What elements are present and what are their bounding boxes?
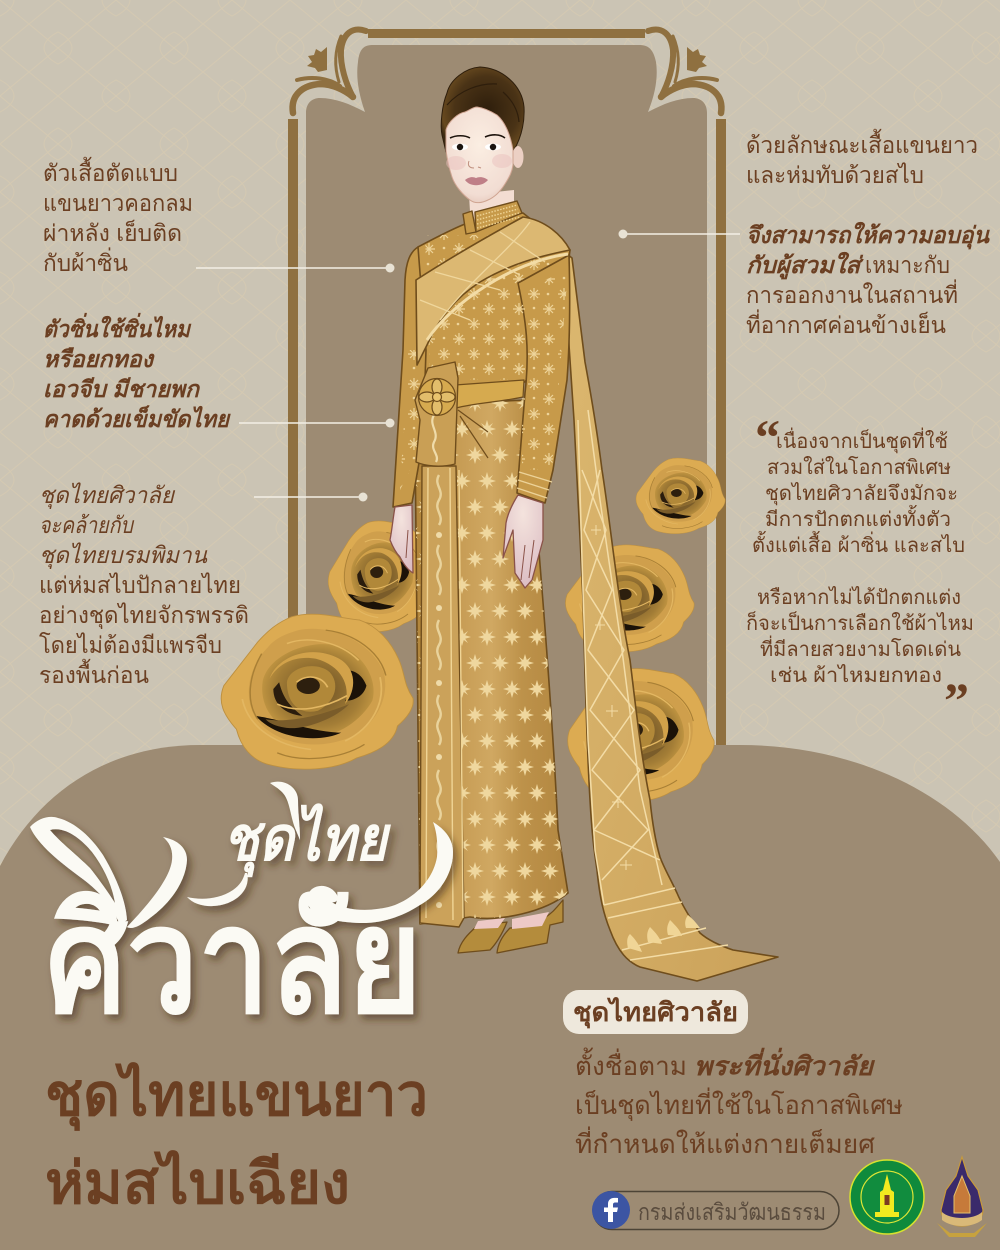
left text block: comparison [39,482,249,688]
closing quote mark: ” [944,672,969,728]
left text block: comparison: ชุดไทยศิวาลัย [39,482,175,509]
description text: พระที่นั่งศิวาลัย [694,1047,876,1081]
facebook pill: กรมส่งเสริมวัฒนธรรม [638,1199,826,1225]
left text block: skirt: ตัวซิ่นใช้ซิ่นไหม [43,312,192,342]
description text: เป็นชุดไทยที่ใช้ในโอกาสพิเศษ [575,1087,903,1121]
front panel of skirt [420,466,464,927]
bodice [413,213,570,390]
title swashes [30,782,453,928]
opening quote mark: “ [755,409,780,465]
quote block: เช่น ผ้าไหมยกทอง [770,664,942,687]
left text block: skirt: เอวจีบ มีชายพก [43,376,201,402]
subtitle: ชุดไทยแขนยาว [45,1062,428,1132]
shoes [458,900,563,953]
quote block: ชุดไทยศิวาลัยจึงมักจะ [765,482,958,506]
subtitle: ห่มสไบเฉียง [45,1150,350,1216]
left sleeve [393,247,426,507]
right text block: warmth: และห่มทับด้วยสไบ [746,162,924,188]
main title [30,782,453,1044]
pleat and belt [415,362,524,466]
logo: department of cultural promotion [850,1160,924,1234]
name pill: ชุดไทยศิวาลัย [573,996,738,1029]
description text: ที่กำหนดให้แต่งกายเต็มยศ [575,1126,875,1159]
right text block: warmth [746,129,990,338]
right text block: warmth: ที่อากาศค่อนข้างเย็น [746,309,946,338]
left text block: comparison: ชุดไทยบรมพิมาน [39,542,208,569]
right text block: warmth: จึงสามารถให้ความอบอุ่น [746,221,990,250]
description text [575,1047,903,1159]
description text: ตั้งชื่อตาม [575,1047,687,1081]
bottom hill [0,745,1000,1250]
left text block: comparison: จะคล้ายกับ [39,512,135,538]
left text block: comparison: อย่างชุดไทยจักรพรรดิ [39,602,249,629]
icon: facebook [592,1191,630,1229]
right text block: warmth: ด้วยลักษณะเสื้อแขนยาว [746,129,978,158]
figure in Thai dress [390,67,778,981]
hands [390,495,543,588]
quote block: ก็จะเป็นการเลือกใช้ผ้าไหม [746,610,974,635]
hanging sash [562,250,778,981]
big rose in front [221,614,413,769]
logo: ministry of culture [937,1157,987,1237]
left text block: blouse [43,157,193,276]
right text block: warmth: กับผู้สวมใส่ [746,251,864,280]
left text block: skirt: หรือยกทอง [43,346,155,372]
left text block: comparison: โดยไม่ต้องมีแพรจีบ [39,632,222,658]
right sleeve [517,255,570,503]
head [441,67,524,203]
quote block: ที่มีลายสวยงามโดดเด่น [760,635,961,661]
left text block: comparison: แต่ห่มสไบปักลายไทย [39,572,241,598]
quote block: หรือหากไม่ได้ปักตกแต่ง [757,586,961,609]
left text block: skirt [43,312,231,432]
right text block: warmth: เหมาะกับ [865,252,950,278]
quote block: เนื่องจากเป็นชุดที่ใช้ [776,427,948,454]
neck and collar [463,190,522,234]
title line: chut thai: ชุดไทย [223,803,391,878]
left text block: comparison: รองพื้นก่อน [39,659,149,688]
right text block: warmth: การออกงานในสถานที่ [746,279,958,308]
left text block: blouse: ผ่าหลัง เย็บติด [43,218,182,246]
left text block: skirt: คาดด้วยเข็มขัดไทย [43,405,231,432]
subtitle [45,1062,428,1216]
skirt [415,400,568,924]
left text block: blouse: แขนยาวคอกลม [43,190,193,216]
rose decorations [328,458,725,801]
sash across chest [416,217,570,365]
ornate frame [288,29,726,759]
left text block: blouse: กับผ้าซิ่น [43,247,128,276]
title line: siwalai: ศิวาลัย [46,879,422,1044]
left text block: blouse: ตัวเสื้อตัดแบบ [43,157,178,186]
quote block [746,409,974,728]
arch panel [306,45,707,750]
facebook pill [592,1191,839,1230]
quote block: มีการปักตกแต่งทั้งตัว [765,505,951,531]
quote block: ตั้งแต่เสื้อ ผ้าซิ่น และสไบ [752,531,965,557]
callout lines [196,230,740,502]
quote block: สวมใส่ในโอกาสพิเศษ [767,456,951,479]
name pill [563,990,748,1034]
